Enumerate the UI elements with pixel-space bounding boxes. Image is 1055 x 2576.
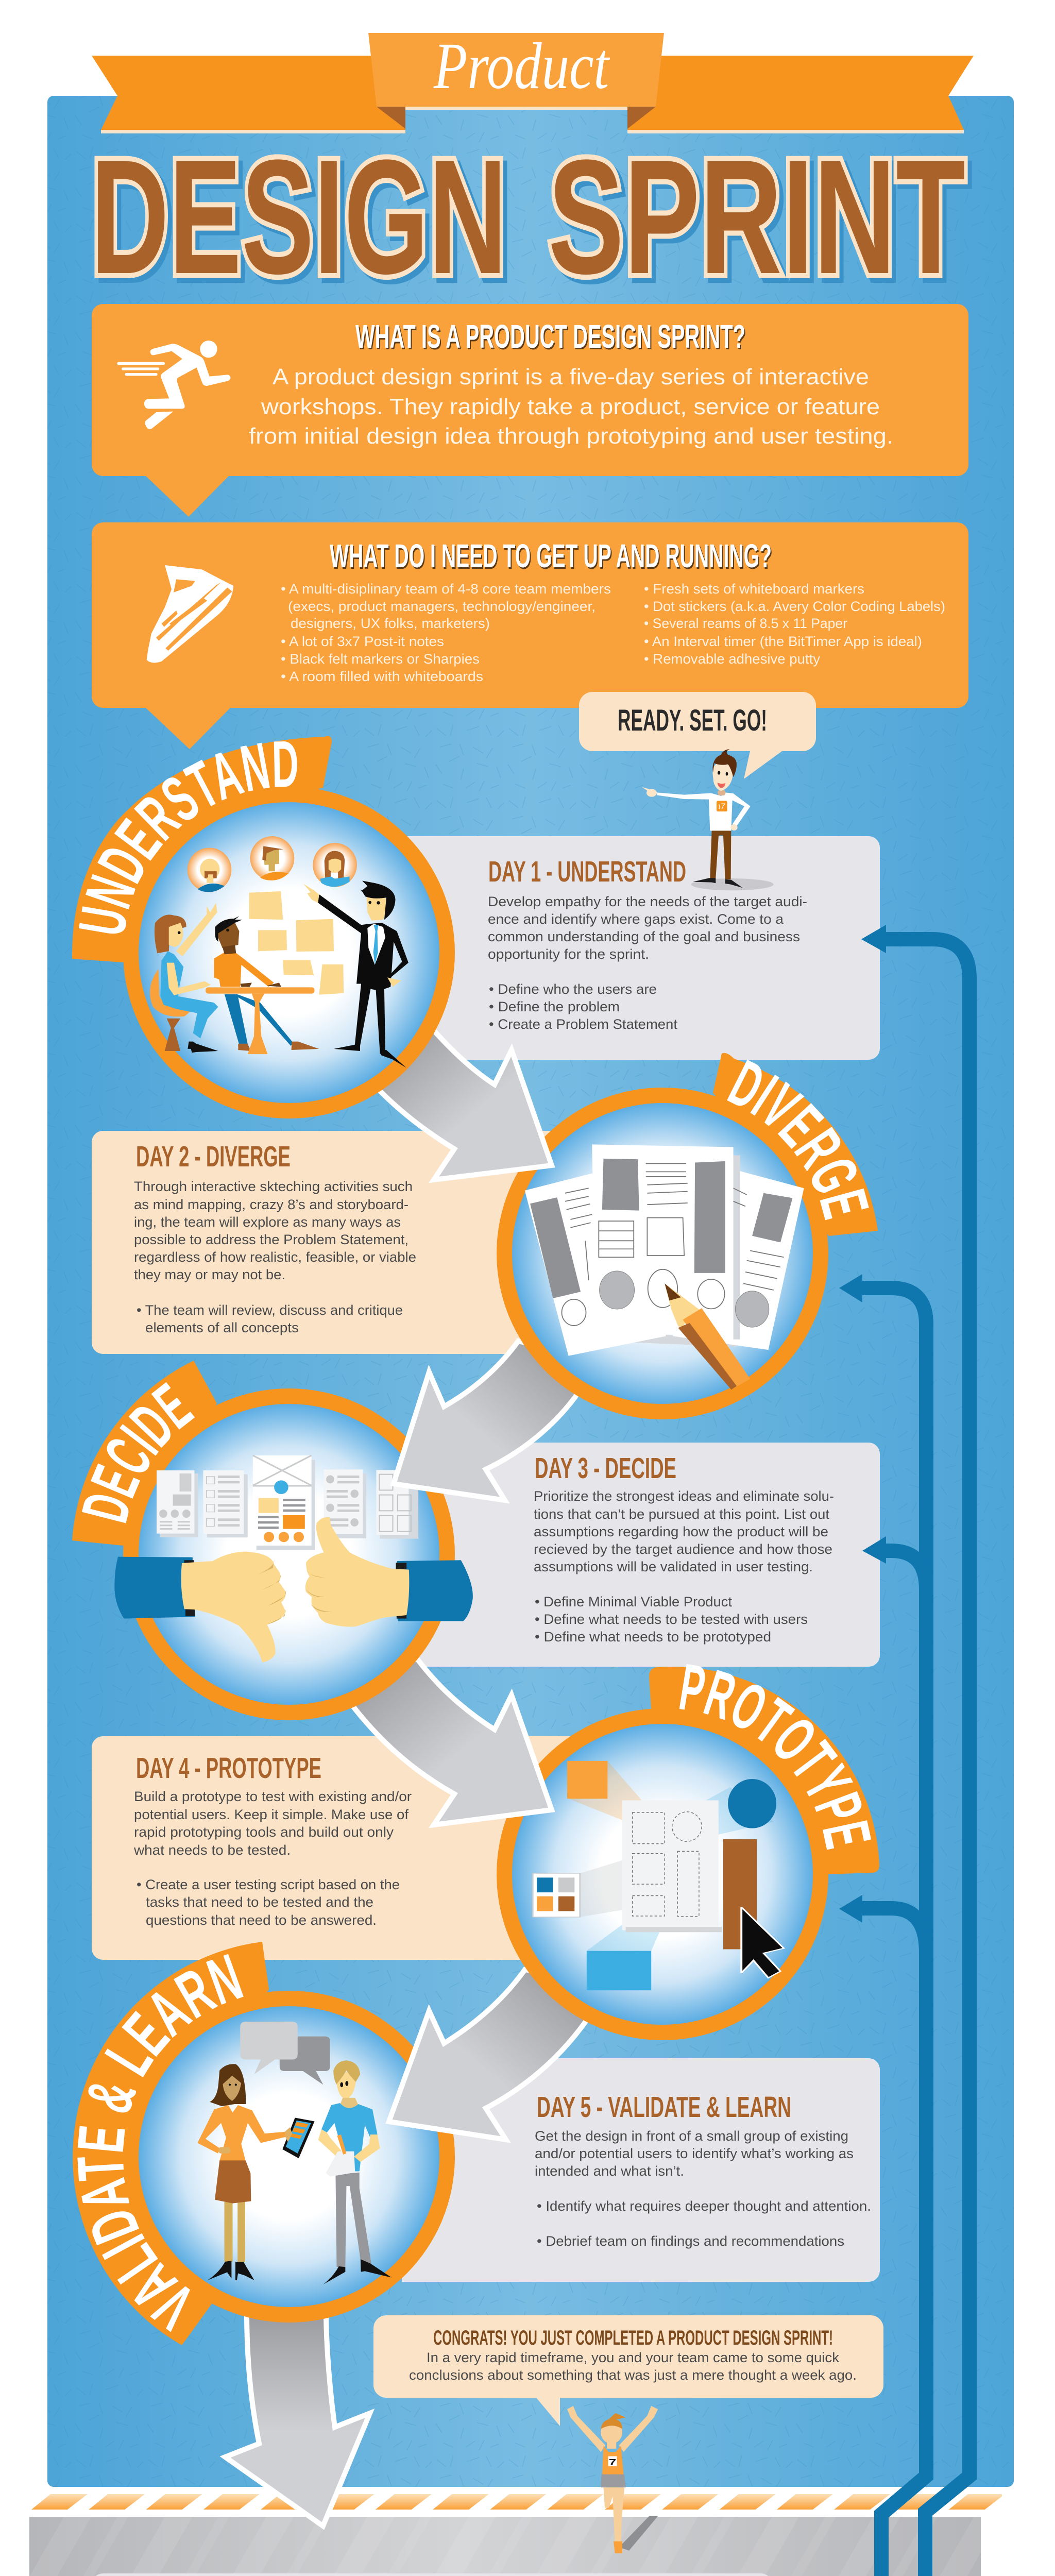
callout: congrats <box>373 2315 883 2426</box>
body text: questions that need to be answered. <box>146 1912 377 1928</box>
icon: thumbs up hand <box>305 1517 473 1626</box>
body text <box>488 894 807 962</box>
arrow 2: diverge to decide <box>394 1341 598 1500</box>
panel: day 4 prototype <box>92 1736 577 1960</box>
runner crossing finish line: 7 <box>609 2458 616 2467</box>
seated man and table <box>206 916 319 1054</box>
main title: Design Sprint: DESIGN <box>91 126 507 308</box>
panel: day 1 understand <box>402 836 880 1060</box>
body text <box>249 364 893 449</box>
circle: understand <box>72 736 455 1118</box>
body text: tions that can’t be pursued at this point. List out <box>534 1506 829 1522</box>
arrow: back to diverge <box>772 1274 926 2576</box>
callout: congrats: In a very rapid timeframe, you and your team came to some quick <box>427 2350 839 2365</box>
supply list left: • Black felt markers or Sharpies <box>281 651 480 667</box>
icon: running shoe <box>147 565 233 663</box>
standing man in suit <box>303 881 409 1068</box>
runner crossing finish line <box>567 2406 658 2553</box>
heading: DAY 4 - PROTOTYPE <box>136 1752 321 1785</box>
panel: what do I need <box>92 522 968 749</box>
body text: • Debrief team on findings and recommendations <box>537 2233 844 2249</box>
body text: as mind mapping, crazy 8’s and storyboard- <box>134 1197 409 1212</box>
illustration: wireframes and thumbs <box>114 1455 473 1663</box>
body text: tasks that need to be tested and the <box>146 1894 373 1910</box>
title ribbon <box>92 29 974 133</box>
body text: they may or may not be. <box>134 1267 285 1282</box>
body text <box>133 1789 412 1928</box>
heading: WHAT IS A PRODUCT DESIGN SPRINT? <box>355 318 745 355</box>
body text: • Identify what requires deeper thought and attention. <box>537 2198 871 2214</box>
panel: day 5 validate and learn <box>402 2058 880 2282</box>
body text: potential users. Keep it simple. Make use of <box>134 1807 409 1822</box>
supply list right: • Dot stickers (a.k.a. Avery Color Coding Labels) <box>644 599 945 614</box>
body text: recieved by the target audience and how those <box>534 1541 832 1557</box>
body text: assumptions will be validated in user testing. <box>534 1559 813 1574</box>
body text: workshops. They rapidly take a product, service or feature <box>261 394 880 419</box>
presenter with t7 shirt: t7 <box>719 803 725 811</box>
body text: Build a prototype to test with existing and/or <box>134 1789 412 1804</box>
arrow: back to prototype <box>839 1895 926 1953</box>
arrow 5: to outcomes <box>225 2287 370 2526</box>
bullets <box>489 981 678 1032</box>
band label: DIVERGE <box>727 1060 869 1220</box>
supply list right: • Fresh sets of whiteboard markers <box>644 581 864 597</box>
panel: so how did you do <box>92 2573 772 2576</box>
illustration: sketch sheets and pencil <box>525 1144 804 1389</box>
supply list right: • An Interval timer (the BitTimer App is ideal) <box>644 634 922 649</box>
illustration: prototype wireframe <box>533 1761 784 1990</box>
band label: UNDERSTAND <box>79 741 297 934</box>
body text: possible to address the Problem Statement, <box>134 1232 409 1247</box>
illustration: two people with tablet <box>197 2022 392 2284</box>
callout: ready set go: READY. SET. GO! <box>618 704 767 737</box>
body text: Develop empathy for the needs of the target audi- <box>488 894 807 909</box>
finish line stripes <box>31 2494 1002 2510</box>
circle: decide <box>72 1361 473 1720</box>
heading: DAY 2 - DIVERGE <box>136 1140 291 1173</box>
heading: DAY 3 - DECIDE <box>535 1452 676 1485</box>
bullets: • Define who the users are <box>489 981 657 997</box>
body text: intended and what isn’t. <box>535 2163 684 2179</box>
supply list right <box>644 581 945 667</box>
body text: opportunity for the sprint. <box>488 946 649 962</box>
supply list left: (execs, product managers, technology/engineer, <box>288 599 595 614</box>
heading: WHAT DO I NEED TO GET UP AND RUNNING? <box>330 537 772 574</box>
supply list right: • Several reams of 8.5 x 11 Paper <box>644 616 847 631</box>
arrow: back to understand <box>772 925 969 2576</box>
arrow: back to decide <box>862 1536 926 1589</box>
icon: running man <box>117 341 230 429</box>
callout: ready set go <box>579 692 816 779</box>
callout: congrats: conclusions about something that was just a mere thought a week ago. <box>409 2367 857 2383</box>
body text: ing, the team will explore as many ways as <box>134 1214 401 1230</box>
heading: DAY 1 - UNDERSTAND <box>488 855 686 888</box>
body text: Get the design in front of a small group of existing <box>535 2128 848 2144</box>
title word: Product: Product <box>433 29 610 103</box>
body text: • Define what needs to be tested with users <box>535 1612 808 1627</box>
body text: from initial design idea through prototyping and user testing. <box>249 423 893 449</box>
band label: PROTOTYPE <box>679 1664 872 1850</box>
bullets: • Create a Problem Statement <box>489 1016 678 1032</box>
circle: prototype <box>497 1664 879 2040</box>
supply list right: • Removable adhesive putty <box>644 651 821 667</box>
body text: common understanding of the goal and business <box>488 929 800 944</box>
arrow 1: understand to diverge <box>361 1030 552 1180</box>
body text: Prioritize the strongest ideas and eliminate solu- <box>534 1488 834 1504</box>
supply list left: • A multi-disiplinary team of 4-8 core team members <box>281 581 611 597</box>
body text: rapid prototyping tools and build out only <box>134 1824 394 1840</box>
seated woman <box>150 903 218 1053</box>
arrow 3: decide to prototype <box>330 1659 552 1825</box>
presenter with t7 shirt <box>642 749 774 890</box>
panel: day 3 decide <box>402 1443 880 1667</box>
panel: what is a product design sprint <box>92 304 968 517</box>
body text: what needs to be tested. <box>133 1842 291 1858</box>
circle: validate and learn <box>73 1942 455 2345</box>
arrow 4: prototype to validate <box>389 1970 608 2140</box>
body text: and/or potential users to identify what’s working as <box>535 2146 854 2161</box>
circle: diverge <box>497 1053 878 1419</box>
bullets: • Define the problem <box>489 999 620 1014</box>
band label: DECIDE <box>82 1382 195 1523</box>
body text <box>134 1179 416 1335</box>
icon: mouse cursor <box>741 1907 784 1978</box>
icon: pencil <box>665 1283 750 1389</box>
icon: thumbs down hand <box>114 1552 286 1663</box>
body text: • Define what needs to be prototyped <box>535 1629 771 1645</box>
body text: assumptions regarding how the product will be <box>534 1524 828 1539</box>
panel: day 2 diverge <box>92 1131 567 1354</box>
band label: VALIDATE & LEARN <box>77 1954 244 2332</box>
gray outcomes background <box>29 2517 981 2576</box>
sticky notes <box>249 891 344 995</box>
supply list left: designers, UX folks, marketers) <box>291 616 490 631</box>
persona icons <box>188 836 357 892</box>
body text: • Create a user testing script based on the <box>137 1877 400 1892</box>
body text: Through interactive skteching activities such <box>134 1179 413 1194</box>
body text: elements of all concepts <box>145 1320 299 1335</box>
body text: ence and identify where gaps exist. Come to a <box>488 911 784 927</box>
body text <box>534 1488 834 1645</box>
body text: • Define Minimal Viable Product <box>535 1594 732 1609</box>
supply list left <box>281 581 611 684</box>
heading: DAY 5 - VALIDATE & LEARN <box>537 2091 791 2124</box>
body text: • The team will review, discuss and critique <box>137 1302 403 1318</box>
supply list left: • A lot of 3x7 Post-it notes <box>281 634 444 649</box>
body text <box>535 2128 871 2249</box>
body text: regardless of how realistic, feasible, or viable <box>134 1249 416 1265</box>
body text: A product design sprint is a five-day series of interactive <box>273 364 869 389</box>
supply list left: • A room filled with whiteboards <box>281 669 483 684</box>
illustration: team workshop <box>150 836 409 1068</box>
